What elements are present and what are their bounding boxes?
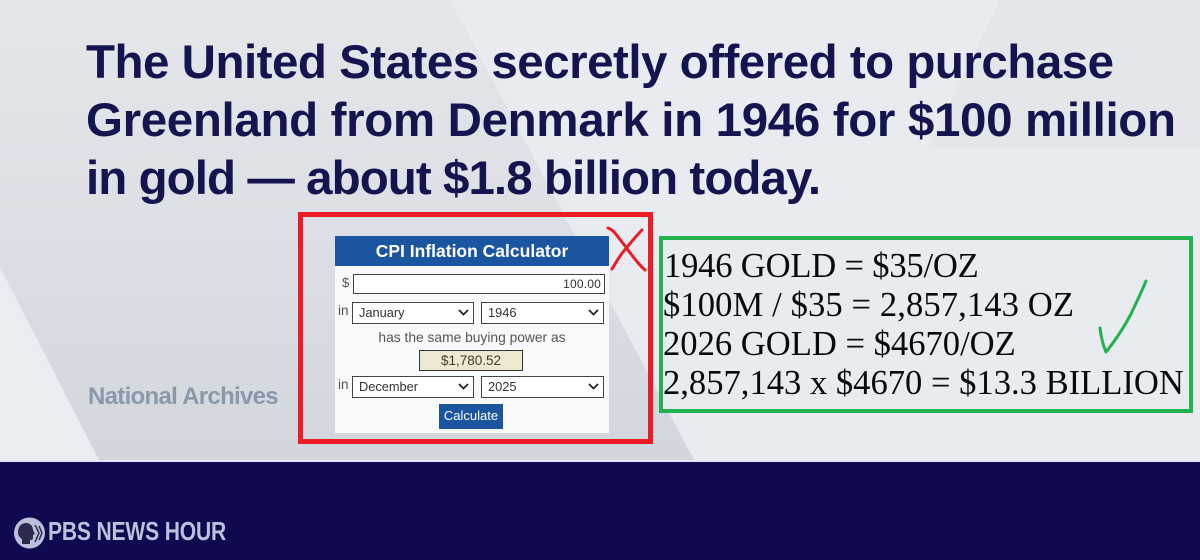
- photo credit: National Archives: [88, 383, 278, 410]
- start month: January: [359, 305, 405, 320]
- in label: in: [338, 303, 349, 318]
- start year: 1946: [488, 305, 516, 320]
- title: in gold — about $1.8 billion today.: [86, 152, 820, 205]
- in label: in: [338, 377, 349, 392]
- icon: red X: [606, 226, 647, 272]
- dollar label: $: [342, 275, 349, 290]
- calculator header: CPI Inflation Calculator: [376, 241, 568, 261]
- gold calculation text: 1946 GOLD = $35/OZ: [664, 247, 979, 285]
- calculate button: [439, 404, 503, 429]
- end year: [481, 376, 604, 398]
- calculate button: Calculate: [444, 408, 498, 423]
- gold calculation text: 2,857,143 x $4670 = $13.3 BILLION: [663, 364, 1184, 402]
- amount input: [353, 274, 605, 294]
- gold calculation text: $100M / $35 = 2,857,143 OZ: [663, 286, 1074, 324]
- start year: [481, 302, 604, 324]
- result value: [419, 350, 523, 371]
- title: [86, 36, 1176, 205]
- calculator header: [335, 236, 609, 266]
- panel: CPI inflation calculator in red frame: [298, 212, 653, 444]
- icon: green check mark: [1098, 280, 1148, 354]
- title: Greenland from Denmark in 1946 for $100 million: [86, 94, 1176, 147]
- same buying power text: has the same buying power as: [378, 330, 566, 345]
- result value: $1,780.52: [441, 353, 501, 368]
- end month: [352, 376, 474, 398]
- start month: [352, 302, 474, 324]
- end year: 2025: [488, 379, 516, 394]
- PBS News Hour wordmark: PBS NEWS HOUR: [48, 516, 226, 546]
- title: The United States secretly offered to purchase: [86, 36, 1114, 89]
- gold calculation text: [663, 247, 1184, 402]
- PBS logo: [14, 518, 45, 548]
- gold calculation text: 2026 GOLD = $4670/OZ: [663, 325, 1016, 363]
- end month: December: [359, 379, 418, 394]
- CPI calculator widget: [335, 236, 609, 433]
- footer bar: [0, 462, 1200, 560]
- amount input: 100.00: [563, 277, 601, 291]
- panel: gold calculation in green frame: [659, 236, 1193, 413]
